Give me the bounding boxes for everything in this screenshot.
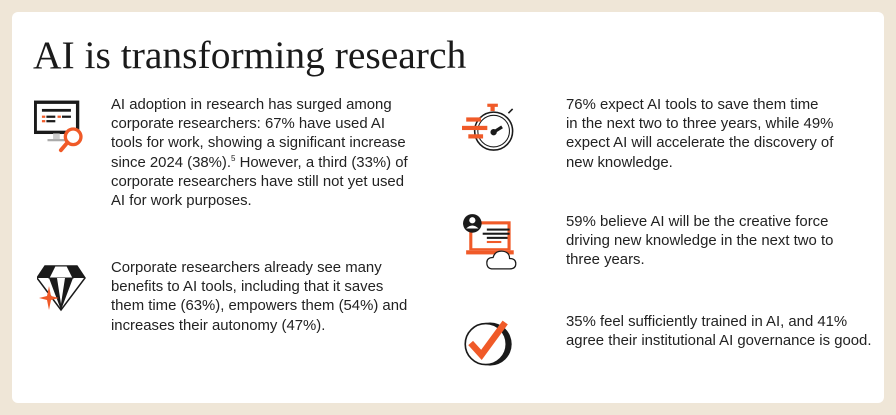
text block 1: AI adoption in research has surged among — [111, 97, 392, 113]
text block 3 — [566, 97, 834, 171]
text block 4: 59% believe AI will be the creative force — [566, 214, 828, 230]
text block 4: driving new knowledge in the next two to — [566, 233, 833, 249]
icon: monitor with magnifier — [34, 100, 83, 152]
text block 2: Corporate researchers already see many — [111, 260, 382, 276]
title: AI is transforming research — [33, 33, 466, 77]
icon: diamond — [37, 265, 86, 312]
text block 2: benefits to AI tools, including that it saves — [111, 279, 383, 295]
text block 1: tools for work, showing a significant increase — [111, 135, 406, 151]
text block 1 — [111, 97, 408, 209]
text block 1: corporate researchers: 67% have used AI — [111, 116, 385, 132]
text block 5: 35% feel sufficiently trained in AI, and 41% — [566, 314, 847, 330]
text block 1: AI for work purposes. — [111, 193, 252, 209]
text block 2 — [111, 260, 407, 334]
text block 1: since 2024 (38%).5 However, a third (33%) of — [111, 154, 408, 171]
text block 5: agree their institutional AI governance is good. — [566, 333, 871, 349]
text block 4: three years. — [566, 252, 645, 268]
text block 1: corporate researchers have still not yet used — [111, 174, 404, 190]
text block 2: increases their autonomy (47%). — [111, 318, 325, 334]
text block 5 — [566, 314, 871, 349]
text block 3: 76% expect AI tools to save them time — [566, 97, 818, 113]
text block 2: them time (63%), empowers them (54%) and — [111, 298, 407, 314]
icon: stopwatch — [462, 104, 514, 151]
icon: laptop with person and cloud — [463, 214, 516, 270]
icon: checkmark circle — [464, 320, 512, 366]
text block 3: new knowledge. — [566, 155, 673, 171]
text block 3: expect AI will accelerate the discovery of — [566, 135, 833, 151]
text block 4 — [566, 214, 833, 268]
text block 3: in the next two to three years, while 49% — [566, 116, 833, 132]
